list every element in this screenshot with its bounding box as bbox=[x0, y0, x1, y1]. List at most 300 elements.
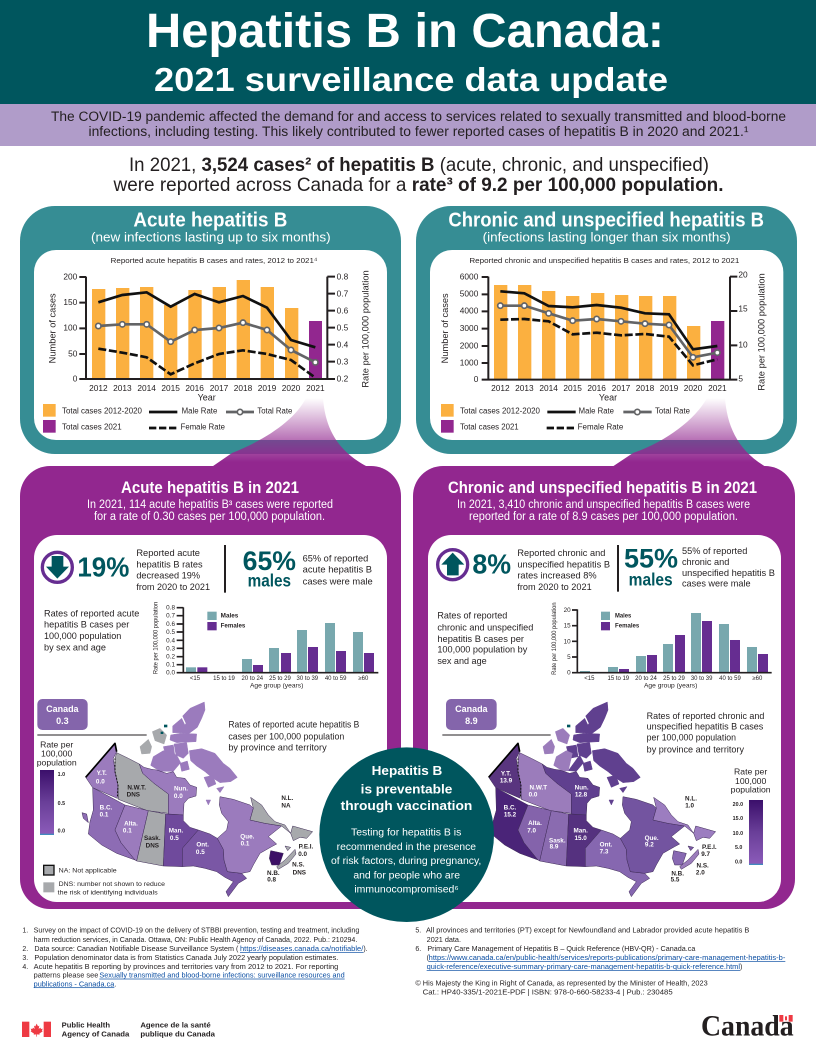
stat: 55 percent males: 55% bbox=[624, 543, 678, 573]
province labels: Y.T. bbox=[97, 770, 107, 777]
sex and age description: 100,000 population bbox=[44, 631, 121, 641]
chart legend: Male Rate bbox=[182, 407, 218, 416]
agency name: Agence de la santé bbox=[140, 1021, 211, 1030]
chart legend: Total cases 2012-2020 bbox=[460, 407, 541, 416]
sex and age description: Rates of reported bbox=[437, 611, 507, 621]
stat description: cases were male bbox=[303, 577, 373, 587]
stat description: chronic and bbox=[682, 557, 729, 567]
combo chart: 0.6 bbox=[337, 305, 349, 315]
map legend scale: 0.0 bbox=[735, 859, 742, 865]
heading: Chronic and unspecified hepatitis B in 2021 bbox=[448, 479, 757, 497]
summary text bbox=[457, 499, 750, 523]
bar chart: rates by sex and age: 30 to 39 bbox=[691, 676, 713, 682]
map key: DNS: number not shown to reduce bbox=[59, 881, 166, 888]
map title: cases per 100,000 population bbox=[228, 731, 344, 741]
province labels: DNS bbox=[127, 792, 140, 799]
combo chart: Year bbox=[599, 392, 617, 402]
province labels: 7.3 bbox=[600, 848, 609, 855]
bar chart: rates by sex and age: <15 bbox=[584, 676, 595, 682]
icon: up arrow bbox=[438, 550, 468, 580]
combo chart: 2019 bbox=[660, 383, 679, 393]
summary statement: were reported across Canada for a rate³ of 9.2 per 100,000 population. bbox=[113, 174, 724, 196]
province labels: Nun. bbox=[174, 786, 188, 793]
stat: 8 percent: 8% bbox=[472, 548, 511, 579]
map legend scale: 0.0 bbox=[58, 829, 65, 835]
stat: 55 percent males: males bbox=[629, 569, 673, 589]
funnel connector: acute 2021 bar to panel bbox=[200, 398, 368, 475]
map legend scale: population bbox=[37, 757, 77, 767]
combo chart: 2018 bbox=[636, 383, 655, 393]
chart legend: Total Rate bbox=[655, 407, 691, 416]
province labels: Sask. bbox=[549, 838, 566, 845]
bar chart: rates by sex and age: 20 bbox=[564, 607, 571, 614]
callout body: and for people who are bbox=[353, 871, 460, 882]
bar chart: rates by sex and age: 40 to 59 bbox=[325, 676, 347, 682]
chart legend: Total cases 2021 bbox=[62, 423, 122, 432]
heading: Acute hepatitis B in 2021 bbox=[121, 479, 299, 497]
combo chart: 2016 bbox=[587, 383, 606, 393]
footnotes: right column: 2021 data. bbox=[427, 937, 461, 944]
combo chart bbox=[47, 270, 371, 402]
stat description: decreased 19% bbox=[136, 570, 200, 580]
title: Hepatitis B in Canada: bbox=[146, 5, 664, 58]
province labels bbox=[96, 770, 314, 884]
combo chart: 2021 bbox=[306, 383, 325, 393]
province labels: 15.0 bbox=[575, 835, 587, 842]
footnotes: right column: 5. bbox=[415, 928, 421, 935]
province labels: 0.5 bbox=[170, 835, 179, 842]
footnotes: right column: ) bbox=[740, 964, 742, 971]
map section: chronic bbox=[442, 699, 771, 897]
combo chart: 50 bbox=[68, 348, 78, 358]
province labels: Nun. bbox=[575, 784, 589, 791]
footnotes: left column: Data source: Canadian Notifiable Disease Surveillance System ( bbox=[34, 946, 239, 953]
map title bbox=[647, 711, 764, 755]
logo: Public Health Agency of Canada bbox=[22, 1021, 216, 1038]
stat description bbox=[517, 548, 610, 592]
chart title: Reported acute hepatitis B cases and rates, 2012 to 2021⁴ bbox=[111, 256, 317, 265]
combo chart: 2013 bbox=[515, 383, 534, 393]
combo chart: 2016 bbox=[185, 383, 204, 393]
province labels: B.C. bbox=[100, 804, 113, 811]
sex and age description: chronic and unspecified bbox=[437, 623, 533, 633]
bar chart: rates by sex and age: 0.2 bbox=[166, 654, 175, 661]
province labels: 0.1 bbox=[123, 828, 132, 835]
bar chart: rates by sex and age: 30 to 39 bbox=[297, 676, 319, 682]
combo chart: 2017 bbox=[612, 383, 631, 393]
combo chart: 10 bbox=[738, 339, 748, 349]
combo chart: 100 bbox=[63, 323, 78, 333]
province labels: Que. bbox=[645, 835, 659, 842]
summary statement bbox=[113, 154, 724, 196]
acute panel details bbox=[42, 545, 378, 690]
logo: Canada wordmark: Canada bbox=[701, 1011, 794, 1043]
combo chart: 200 bbox=[63, 272, 78, 282]
combo chart: 2020 bbox=[684, 383, 703, 393]
footnotes: left column bbox=[22, 928, 368, 988]
map of Canada bbox=[485, 702, 716, 897]
combo chart: 2019 bbox=[258, 383, 277, 393]
bar chart: rates by sex and age: 15 bbox=[564, 623, 571, 630]
map section: acute bbox=[37, 699, 359, 897]
stat description: unspecified hepatitis B bbox=[682, 568, 775, 578]
stat description: acute hepatitis B bbox=[303, 565, 372, 575]
sex and age description: sex and age bbox=[437, 656, 487, 666]
bar chart: rates by sex and age: 0.6 bbox=[166, 621, 175, 628]
combo chart: 2017 bbox=[210, 383, 229, 393]
footnotes: left column: 4. bbox=[22, 964, 28, 971]
province labels: Alta. bbox=[124, 820, 138, 827]
stat description: from 2020 to 2021 bbox=[517, 582, 592, 592]
bar chart: rates by sex and age: 0.8 bbox=[166, 605, 175, 612]
bar chart: rates by sex and age: 5 bbox=[567, 654, 571, 661]
bar chart: rates by sex and age: 0.5 bbox=[166, 629, 175, 636]
combo chart: 2000 bbox=[460, 340, 479, 350]
bar chart: rates by sex and age: Rate per 100,000 population bbox=[154, 602, 160, 674]
combo chart: 3000 bbox=[460, 323, 479, 333]
agency name: Agency of Canada bbox=[62, 1029, 130, 1038]
province labels: 0.0 bbox=[174, 793, 183, 800]
callout heading: is preventable bbox=[361, 781, 452, 796]
sex and age description: by sex and age bbox=[44, 643, 106, 653]
callout body: recommended in the presence bbox=[337, 842, 476, 853]
subheading: (infections lasting longer than six months) bbox=[483, 230, 731, 245]
bar chart: rates by sex and age: Females bbox=[615, 623, 640, 630]
chart legend: Total cases 2021 bbox=[460, 423, 519, 432]
stat description bbox=[303, 554, 373, 587]
footnotes: left column: https://diseases.canada.ca/notifiable/ bbox=[240, 946, 363, 953]
stat: 19 percent: 19% bbox=[77, 552, 129, 583]
stat description: hepatitis B rates bbox=[136, 559, 203, 569]
Canada rate box: Canada bbox=[46, 704, 80, 714]
Canada rate box: 8.9 bbox=[465, 716, 478, 726]
bar chart: rates by sex and age: 0.7 bbox=[166, 613, 175, 620]
stat description: 65% of reported bbox=[303, 554, 368, 564]
bar chart: rates by sex and age: ≥60 bbox=[358, 676, 369, 682]
combo chart: 0.8 bbox=[337, 272, 349, 282]
province labels: P.E.I. bbox=[702, 844, 717, 851]
combo chart: 150 bbox=[63, 297, 78, 307]
sex and age description bbox=[44, 609, 139, 653]
bar chart: rates by sex and age: 0.0 bbox=[166, 670, 175, 677]
stat description: unspecified hepatitis B bbox=[517, 559, 610, 569]
stat description: rates increased 8% bbox=[517, 570, 597, 580]
lavender intro band: The COVID-19 pandemic affected the demand for and access to services related to sexually transmitted and blood-borne bbox=[51, 109, 786, 124]
combo chart: 2021 bbox=[708, 383, 727, 393]
combo chart: 6000 bbox=[460, 271, 479, 281]
map legend scale: Rate per bbox=[734, 767, 767, 777]
stat: 65 percent males bbox=[243, 546, 296, 591]
map legend scale: 1.0 bbox=[58, 772, 65, 778]
combo chart: 0 bbox=[73, 373, 78, 383]
combo chart: 5 bbox=[738, 373, 743, 383]
chart legend: Total cases 2012-2020 bbox=[62, 407, 143, 416]
province labels: P.E.I. bbox=[299, 844, 314, 851]
sex and age description: 100,000 population by bbox=[437, 645, 528, 655]
sex and age description: hepatitis B cases per bbox=[44, 620, 129, 630]
callout body: of risk factors, during pregnancy, bbox=[331, 856, 481, 867]
map legend scale: 10.0 bbox=[733, 831, 743, 837]
footnotes: left column: 1. bbox=[22, 928, 28, 935]
map title bbox=[228, 720, 359, 753]
province labels: 13.9 bbox=[500, 778, 513, 785]
chart legend: Female Rate bbox=[181, 423, 226, 432]
callout: prevention circle bbox=[319, 747, 494, 922]
footnotes: left column: harm reduction services, in Canada. Ottawa, ON: Public Health Agency of Canada, 2022. Pub.: 210294. bbox=[34, 937, 357, 944]
combo chart: 2012 bbox=[491, 383, 510, 393]
province labels: N.L. bbox=[281, 795, 294, 802]
footnotes: left column: Survey on the impact of COVID-19 on the delivery of STBBI prevention, testing and treatment, including bbox=[34, 928, 359, 935]
combo chart: 0.4 bbox=[337, 339, 349, 349]
combo chart: 1000 bbox=[460, 358, 479, 368]
footnotes: left column: 3. bbox=[22, 955, 28, 962]
funnel connector: chronic 2021 bar to panel bbox=[600, 398, 766, 475]
combo chart: 0 bbox=[474, 374, 479, 384]
panel: chronic and unspecified hepatitis B in 2021 bbox=[413, 466, 795, 909]
combo chart: 4000 bbox=[460, 306, 479, 316]
summary text: In 2021, 114 acute hepatitis B³ cases were reported bbox=[87, 499, 333, 511]
map legend scale: 100,000 bbox=[41, 749, 72, 759]
province labels: Alta. bbox=[528, 820, 542, 827]
agency name bbox=[62, 1021, 216, 1038]
panel: chronic and unspecified hepatitis B bbox=[416, 206, 797, 454]
province labels: 0.8 bbox=[267, 877, 277, 884]
footnotes: right column: All provinces and territories (PT) except for Newfoundland and Labrador provided acute hepatitis B bbox=[426, 928, 750, 935]
map title: per 100,000 population bbox=[647, 733, 736, 743]
callout heading: Hepatitis B bbox=[372, 763, 443, 778]
bar chart: rates by sex and age: 20 to 24 bbox=[635, 676, 657, 682]
map legend scale: 20.0 bbox=[733, 802, 743, 808]
chronic panel details bbox=[437, 543, 775, 690]
Canada rate box bbox=[446, 699, 497, 730]
stat description: 55% of reported bbox=[682, 546, 747, 556]
stat description: from 2020 to 2021 bbox=[136, 582, 210, 592]
bar chart: rates by sex and age: 0 bbox=[567, 670, 571, 677]
bar chart: rates by sex and age bbox=[154, 602, 378, 690]
callout body: immunocompromised⁶ bbox=[354, 885, 459, 896]
map key: the risk of identifying individuals bbox=[58, 890, 158, 897]
combo chart: 0.2 bbox=[337, 373, 349, 383]
footnotes: right column: © His Majesty the King in Right of Canada, as represented by the Minister of Health, 2023 bbox=[415, 980, 708, 988]
province labels: DNS bbox=[146, 843, 159, 850]
bar chart: rates by sex and age: Males bbox=[615, 613, 632, 620]
province labels: N.S. bbox=[697, 863, 709, 870]
combo chart: 2014 bbox=[539, 383, 558, 393]
province labels: 5.5 bbox=[671, 877, 680, 884]
combo chart: 20 bbox=[738, 269, 748, 279]
summary text: for a rate of 0.30 cases per 100,000 population. bbox=[94, 511, 325, 523]
province labels: N.B. bbox=[267, 870, 280, 877]
subheading: (new infections lasting up to six months) bbox=[91, 230, 331, 245]
Canada rate box: 0.3 bbox=[56, 716, 69, 726]
chart legend: Total Rate bbox=[257, 407, 293, 416]
agency name: publique du Canada bbox=[140, 1029, 216, 1038]
province labels: 0.1 bbox=[100, 812, 109, 819]
bar chart: rates by sex and age: Age group (years) bbox=[644, 683, 697, 690]
callout body bbox=[331, 828, 481, 896]
combo chart: 2012 bbox=[89, 383, 108, 393]
stat: 65 percent males: 65% bbox=[243, 546, 296, 576]
stat: 65 percent males: males bbox=[248, 571, 291, 591]
combo chart: Rate per 100,000 population bbox=[361, 270, 371, 388]
stat description bbox=[136, 548, 210, 592]
chart legend: Female Rate bbox=[578, 423, 624, 432]
combo chart: 0.7 bbox=[337, 288, 349, 298]
bar chart: rates by sex and age: 10 bbox=[564, 638, 571, 645]
summary text: reported for a rate of 8.9 cases per 100,000 population. bbox=[469, 511, 738, 523]
combo chart: Number of cases bbox=[440, 293, 450, 363]
province labels: 12.8 bbox=[575, 792, 588, 799]
summary text bbox=[87, 499, 333, 523]
heading: Chronic and unspecified hepatitis B bbox=[448, 210, 764, 232]
map title: by province and territory bbox=[228, 743, 327, 753]
heading: Acute hepatitis B bbox=[133, 210, 287, 232]
agency name: Public Health bbox=[62, 1021, 110, 1030]
province labels: Sask. bbox=[144, 835, 161, 842]
sex and age description: Rates of reported acute bbox=[44, 609, 139, 619]
province labels: 0.1 bbox=[241, 841, 250, 848]
map legend scale bbox=[731, 767, 771, 865]
province labels: N.W.T. bbox=[127, 784, 146, 791]
chart legend bbox=[43, 404, 293, 433]
combo chart: 0.5 bbox=[337, 322, 349, 332]
footnotes: left column: publications - Canada.ca bbox=[34, 981, 114, 988]
chart legend bbox=[441, 404, 691, 433]
map legend scale: Rate per bbox=[40, 739, 73, 749]
lavender intro band: infections, including testing. This likely contributed to fewer reported cases of hepatitis B in 2020 and 2021.¹ bbox=[88, 124, 749, 139]
province labels: Man. bbox=[573, 828, 588, 835]
province labels: Man. bbox=[169, 828, 183, 835]
map key: NA: Not applicable bbox=[59, 868, 117, 875]
combo chart: 2015 bbox=[161, 383, 180, 393]
map legend scale: 100,000 bbox=[735, 776, 766, 786]
map legend scale: 5.0 bbox=[735, 845, 742, 851]
callout body: Testing for hepatitis B is bbox=[351, 828, 461, 839]
bar chart: rates by sex and age: 0.4 bbox=[166, 637, 175, 644]
icon: Canadian flag bbox=[22, 1022, 51, 1037]
bar chart: rates by sex and age: 0.1 bbox=[166, 662, 175, 669]
province labels: N.S. bbox=[292, 862, 305, 869]
bar chart: rates by sex and age: Age group (years) bbox=[250, 683, 303, 690]
bar chart: rates by sex and age: Rate per 100,000 population bbox=[552, 602, 558, 675]
footnotes: right column: quick-reference/executive-summary-primary-care-management-hepatitis-b-quick-reference.html bbox=[427, 964, 740, 971]
stat description: cases were male bbox=[682, 579, 751, 589]
stat description: Reported acute bbox=[136, 548, 200, 558]
map title: Rates of reported acute hepatitis B bbox=[228, 720, 359, 730]
province labels: Ont. bbox=[600, 842, 613, 849]
province labels: NA bbox=[281, 802, 291, 809]
map title: unspecified hepatitis B cases bbox=[647, 722, 764, 732]
combo chart: 2014 bbox=[137, 383, 156, 393]
panel: acute hepatitis B in 2021 bbox=[20, 466, 401, 909]
bar chart: rates by sex and age: 25 to 29 bbox=[269, 676, 291, 682]
divider bbox=[224, 545, 226, 593]
sex and age description bbox=[437, 611, 533, 666]
footnotes: left column: Acute hepatitis B reporting by provinces and territories vary from 2012 to 2021. For reporting bbox=[34, 964, 338, 971]
combo chart: 2018 bbox=[234, 383, 253, 393]
callout heading: through vaccination bbox=[341, 798, 472, 813]
stat description: Reported chronic and bbox=[517, 548, 605, 558]
combo chart: 15 bbox=[738, 304, 748, 314]
header banner bbox=[0, 0, 816, 104]
map title: Rates of reported chronic and bbox=[647, 711, 764, 721]
Canada rate box bbox=[37, 699, 88, 730]
footnotes: left column: patterns please see bbox=[34, 973, 98, 980]
province labels: 7.0 bbox=[527, 828, 537, 835]
province labels: 9.7 bbox=[701, 851, 711, 858]
bar chart: rates by sex and age: 15 to 19 bbox=[213, 676, 235, 682]
footnotes: right column: ( bbox=[427, 955, 430, 962]
province labels: 2.0 bbox=[696, 869, 705, 876]
footnotes: right column: Primary Care Management of Hepatitis B – Quick Reference (HBV-QR) - Canada.ca bbox=[427, 946, 695, 953]
map legend scale: 15.0 bbox=[733, 816, 743, 822]
province labels: 9.2 bbox=[645, 842, 654, 849]
province labels: 0.0 bbox=[298, 851, 308, 858]
province labels: B.C. bbox=[504, 804, 517, 811]
callout heading bbox=[341, 763, 472, 813]
combo chart: Year bbox=[198, 392, 216, 402]
map of Canada bbox=[82, 702, 313, 897]
footnotes: left column: . bbox=[114, 981, 116, 988]
bar chart: rates by sex and age: Females bbox=[221, 623, 246, 630]
footnotes: left column: 2. bbox=[22, 946, 28, 953]
province labels: Que. bbox=[240, 833, 255, 840]
map legend scale: 0.5 bbox=[58, 801, 65, 807]
province labels: 0.0 bbox=[96, 778, 105, 785]
bar chart: rates by sex and age: 20 to 24 bbox=[242, 676, 264, 682]
province labels: 15.2 bbox=[504, 812, 517, 819]
bar chart: rates by sex and age: 25 to 29 bbox=[663, 676, 685, 682]
combo chart: 2015 bbox=[563, 383, 582, 393]
province labels: 0.0 bbox=[529, 792, 538, 799]
combo chart: 2020 bbox=[282, 383, 301, 393]
map title: by province and territory bbox=[647, 745, 744, 755]
combo chart: Rate per 100,000 population bbox=[757, 273, 767, 391]
map legend scale: population bbox=[731, 785, 771, 795]
Canada rate box: Canada bbox=[455, 704, 489, 714]
province labels: Ont. bbox=[196, 842, 209, 849]
footnotes: left column: ). bbox=[363, 946, 368, 953]
summary statement: In 2021, 3,524 cases² of hepatitis B (acute, chronic, and unspecified) bbox=[129, 154, 709, 176]
bar chart: rates by sex and age: 40 to 59 bbox=[719, 676, 741, 682]
chart legend: Male Rate bbox=[579, 407, 615, 416]
combo chart: 5000 bbox=[460, 289, 479, 299]
province labels: DNS bbox=[293, 869, 306, 876]
stat description bbox=[682, 546, 775, 589]
bar chart: rates by sex and age: Males bbox=[221, 613, 239, 620]
province labels bbox=[500, 770, 717, 884]
footnotes: left column: Population denominator data is from Statistics Canada July 2022 yearly population estimates. bbox=[34, 955, 338, 962]
combo chart bbox=[440, 269, 767, 402]
map key bbox=[43, 865, 166, 897]
footnotes: left column: Sexually transmitted and blood-borne infections: surveillance resources and bbox=[99, 973, 345, 980]
bar chart: rates by sex and age: 0.3 bbox=[166, 645, 175, 652]
province labels: 1.0 bbox=[685, 803, 695, 810]
bar chart: rates by sex and age: ≥60 bbox=[752, 676, 763, 682]
province labels: 0.5 bbox=[196, 849, 205, 856]
icon: down arrow bbox=[42, 552, 72, 582]
bar chart: rates by sex and age bbox=[552, 602, 772, 690]
province labels: N.W.T bbox=[530, 784, 547, 791]
combo chart: 0.3 bbox=[337, 356, 349, 366]
panel: acute hepatitis B bbox=[20, 206, 401, 454]
chart title: Reported chronic and unspecified hepatitis B cases and rates, 2012 to 2021 bbox=[469, 256, 739, 265]
footnotes: right column: Cat.: HP40-335/1-2021E-PDF | ISBN: 978-0-660-58233-4 | Pub.: 230485 bbox=[423, 990, 673, 997]
stat: 55 percent males bbox=[624, 543, 678, 589]
footnotes: right column: https://www.canada.ca/en/public-health/services/reports-publications/primary-care-management-hepatitis-b- bbox=[429, 955, 786, 962]
bar chart: rates by sex and age: <15 bbox=[190, 676, 201, 682]
bar chart: rates by sex and age: 15 to 19 bbox=[608, 676, 630, 682]
